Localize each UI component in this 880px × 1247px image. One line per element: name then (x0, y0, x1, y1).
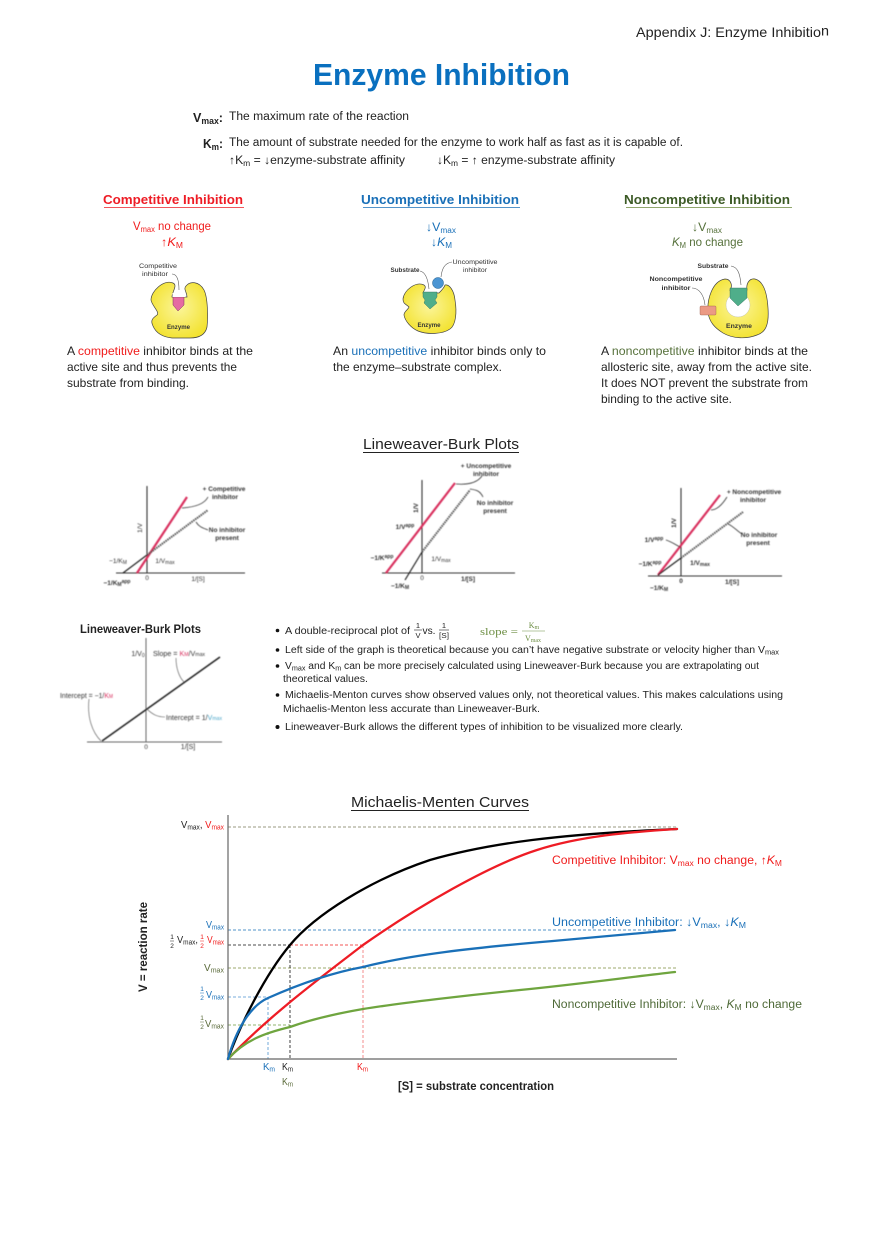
chart: annotated Lineweaver-Burk plot: Intercept = −1/KM (60, 693, 113, 700)
x tick: Km red: K (357, 1062, 364, 1073)
formula: slope (480, 621, 545, 644)
description: competitive: A competitive inhibitor binds at the (67, 344, 253, 358)
chart: competitive Lineweaver-Burk plot: −1/K (109, 558, 123, 565)
panel: competitive inhibition (67, 192, 253, 390)
chart: noncompetitive Lineweaver-Burk plot: present (746, 540, 771, 547)
chart: annotated Lineweaver-Burk plot: Intercept = 1/Vmax (166, 715, 222, 722)
y tick: half Vmax green: max (211, 1024, 224, 1030)
definition: Km: m (243, 159, 251, 168)
effect: noncompetitive: K (672, 235, 681, 249)
chart: noncompetitive Lineweaver-Burk plot: + Noncompetitive (727, 489, 782, 496)
label: competitive inhibitor: K (767, 855, 776, 867)
y tick: half Vmax black and red: max (213, 940, 224, 946)
chart: uncompetitive Lineweaver-Burk plot: inhibitor (473, 471, 499, 478)
chart: competitive Lineweaver-Burk plot: No inhibitor (209, 527, 246, 534)
bullet: double-reciprocal plot: 1 (442, 621, 446, 630)
definition: Km: = ↑ enzyme-substrate affinity (458, 155, 615, 167)
chart: competitive Lineweaver-Burk plot: max (165, 560, 175, 566)
formula: slope: m (535, 625, 540, 631)
chart: competitive Lineweaver-Burk plot: app (122, 579, 130, 585)
definition: Km: m (451, 159, 458, 168)
curve: noncompetitive inhibitor (228, 972, 675, 1059)
icon: enzyme with noncompetitive inhibitor: Noncompetitive (650, 276, 703, 283)
y tick: Vmax black and red: V (181, 820, 188, 831)
chart: noncompetitive Lineweaver-Burk plot: 1/V (671, 517, 678, 528)
effect: competitive: V (133, 219, 141, 233)
chart: competitive Lineweaver-Burk plot: M (117, 582, 122, 588)
effect: uncompetitive: ↓V (426, 220, 440, 234)
description: uncompetitive (333, 344, 546, 374)
curve: competitive inhibitor (228, 829, 677, 1059)
chart: noncompetitive Lineweaver-Burk plot: 1/[S] (725, 579, 739, 586)
chart: uncompetitive Lineweaver-Burk plot: −1/K (391, 583, 405, 590)
icon: enzyme with noncompetitive inhibitor: Enzyme (726, 323, 752, 330)
definition: Vmax: max (201, 116, 219, 126)
header: appendix label: n (821, 22, 829, 38)
chart: noncompetitive Lineweaver-Burk plot: max (700, 562, 710, 568)
bullet: observed values: Michaelis-Menton less accurate than Lineweaver-Burk. (283, 704, 540, 715)
y tick: half Vmax blue: V (206, 990, 213, 1001)
chart: annotated Lineweaver-Burk plot (60, 638, 222, 751)
curve: no inhibitor (228, 829, 677, 1059)
x tick: Km green: K (282, 1077, 289, 1088)
chart: uncompetitive Lineweaver-Burk plot (371, 463, 515, 591)
chart: competitive Lineweaver-Burk plot (104, 486, 246, 588)
chart: competitive Lineweaver-Burk plot: + Competitive (203, 486, 246, 493)
chart: competitive Lineweaver-Burk plot: 1/V (155, 558, 165, 565)
bullet: left side theoretical: max (765, 650, 780, 656)
definition: Km: m (212, 142, 219, 152)
chart: noncompetitive Lineweaver-Burk plot: No inhibitor (741, 532, 778, 539)
description: uncompetitive: An uncompetitive inhibitor binds only to (333, 344, 546, 358)
chart: noncompetitive Lineweaver-Burk plot: −1/K (639, 561, 653, 568)
description: noncompetitive: allosteric site, away from the active site. (601, 360, 812, 374)
y tick: Vmax green: max (211, 968, 224, 974)
subheading: Lineweaver-Burk plots: Lineweaver-Burk Plots (80, 624, 201, 636)
curve: uncompetitive inhibitor (228, 930, 675, 1059)
chart: noncompetitive Lineweaver-Burk plot: app (653, 560, 661, 566)
chart: uncompetitive Lineweaver-Burk plot: M (405, 585, 409, 591)
label: noncompetitive inhibitor: Noncompetitive Inhibitor: ↓V (552, 999, 695, 1011)
icon: enzyme with uncompetitive inhibitor: Substrate (390, 267, 420, 274)
y tick: half Vmax green: 2 (200, 1024, 204, 1031)
description: noncompetitive (601, 344, 812, 406)
bullet: more precise calculation: m (335, 666, 341, 672)
icon: enzyme with competitive inhibitor: Competitive (139, 263, 177, 270)
x tick: Km blue: K (263, 1062, 270, 1073)
chart: noncompetitive Lineweaver-Burk plot: 1/V (690, 560, 700, 567)
y tick: half Vmax black and red: 1 (200, 934, 204, 941)
heading: Lineweaver-Burk plots: Lineweaver-Burk Plots (363, 436, 519, 453)
x tick: Km red: m (363, 1066, 368, 1074)
y tick: half Vmax black and red: max (183, 940, 196, 946)
bullet: double-reciprocal plot: V (415, 631, 421, 640)
label: competitive inhibitor: Competitive Inhibitor: V (552, 855, 671, 867)
chart: noncompetitive Lineweaver-Burk plot: 1/V (645, 537, 654, 544)
panel: noncompetitive inhibition (601, 192, 812, 406)
x tick: Km black: K (282, 1062, 289, 1073)
chart: uncompetitive Lineweaver-Burk plot: max (441, 558, 451, 564)
bullet: more precise calculation: theoretical values. (283, 674, 368, 685)
label: noncompetitive inhibitor: , (720, 999, 726, 1011)
label: uncompetitive inhibitor: K (730, 917, 740, 929)
effect: competitive: ↑K (161, 235, 175, 249)
definition: Km: ↓K (437, 155, 450, 167)
y tick: half Vmax black and red: V (177, 935, 184, 946)
heading: uncompetitive: Uncompetitive Inhibition (361, 192, 519, 207)
bullet: double-reciprocal plot: [S] (439, 631, 449, 640)
chart: uncompetitive Lineweaver-Burk plot: −1/K (371, 555, 385, 562)
effect: competitive (133, 219, 211, 250)
definitions (193, 110, 683, 168)
bullet: more precise calculation: and K (305, 661, 336, 672)
definition: Vmax: V (193, 110, 202, 125)
bullet: observed values (276, 690, 783, 715)
y tick: half Vmax black and red: 2 (170, 943, 174, 950)
bullet: visualized clearly: Lineweaver-Burk allows the different types of inhibition to be visualized more clearly. (285, 722, 683, 733)
effect: uncompetitive: max (440, 226, 456, 235)
label: competitive inhibitor: no change, ↑ (694, 855, 767, 867)
chart: uncompetitive Lineweaver-Burk plot: present (483, 508, 508, 515)
definition: Km: K (203, 136, 212, 151)
y tick: half Vmax blue: 1 (200, 986, 204, 993)
y tick: half Vmax black and red: 2 (200, 943, 204, 950)
bullet: more precise calculation: max (292, 666, 306, 672)
formula: slope: max (531, 638, 541, 644)
icon: enzyme with uncompetitive inhibitor: inhibitor (463, 267, 488, 274)
bullet: double-reciprocal plot (276, 621, 449, 640)
chart: noncompetitive Lineweaver-Burk plot: M (664, 587, 668, 593)
icon: enzyme with competitive inhibitor: inhibitor (142, 271, 169, 278)
effect: noncompetitive: max (706, 226, 722, 235)
y tick: half Vmax blue: 2 (200, 995, 204, 1002)
y tick: half Vmax black and red: V (207, 935, 214, 946)
chart: annotated Lineweaver-Burk plot: 1/[S] (181, 744, 195, 751)
label: noncompetitive inhibitor: K (726, 999, 736, 1011)
heading: competitive: Competitive Inhibition (103, 192, 243, 207)
y tick: Vmax blue: max (212, 924, 224, 932)
chart: annotated Lineweaver-Burk plot: 0 (142, 653, 145, 659)
icon: enzyme with competitive inhibitor: Enzyme (167, 324, 190, 331)
chart: noncompetitive Lineweaver-Burk plot: inhibitor (740, 497, 766, 504)
chart: uncompetitive Lineweaver-Burk plot: 0 (420, 575, 424, 582)
effect: noncompetitive: ↓V (692, 220, 706, 234)
effect: uncompetitive (426, 220, 456, 250)
text block: Lineweaver-Burk notes (276, 621, 783, 733)
definition: Vmax: The maximum rate of the reaction (229, 111, 409, 123)
definition: Km: ↑K (229, 155, 242, 167)
chart: uncompetitive Lineweaver-Burk plot: 1/V (396, 524, 405, 531)
bullet: left side theoretical: Left side of the graph is theoretical because you can’t have negative substrate or velocity higher than V (285, 645, 740, 656)
chart: uncompetitive Lineweaver-Burk plot: app (405, 523, 414, 529)
heading: noncompetitive: Noncompetitive Inhibition (624, 192, 790, 207)
y tick: Vmax green: V (204, 963, 211, 974)
icon: enzyme with uncompetitive inhibitor: Uncompetitive (452, 259, 498, 266)
y tick: Vmax black and red: max (187, 824, 200, 832)
y tick: half Vmax green: 1 (200, 1015, 204, 1022)
y tick: half Vmax blue: max (212, 994, 224, 1002)
axes (228, 815, 677, 1059)
effect: noncompetitive: no change (686, 235, 743, 249)
label: uncompetitive inhibitor: , ↓ (717, 917, 730, 929)
chart: uncompetitive Lineweaver-Burk plot: app (385, 554, 393, 560)
icon: enzyme with uncompetitive inhibitor (390, 259, 498, 333)
formula: slope: V (525, 634, 531, 643)
x tick: Km black: m (288, 1066, 293, 1074)
formula: slope: slope = (480, 626, 518, 638)
label: uncompetitive inhibitor: Uncompetitive Inhibitor: ↓V (552, 917, 689, 929)
definition: Vmax: : (219, 110, 223, 125)
header: appendix label: Appendix J: Enzyme Inhibitio (636, 24, 816, 40)
y tick: half Vmax green (200, 1015, 224, 1031)
description: noncompetitive: A noncompetitive inhibitor binds at the (601, 344, 808, 358)
label: uncompetitive inhibitor: M (739, 921, 746, 930)
chart: competitive Lineweaver-Burk plot: inhibitor (212, 494, 238, 501)
y tick: Vmax black and red: , (200, 820, 205, 831)
icon: enzyme with noncompetitive inhibitor: inhibitor (662, 285, 691, 292)
effect: competitive: max (141, 225, 155, 234)
label: competitive inhibitor: M (775, 859, 782, 868)
bullet: observed values: Michaelis-Menton curves show observed values only, not theoretical values. This makes calculations using (285, 690, 783, 701)
x tick: Km blue: m (269, 1066, 275, 1074)
y tick: half Vmax black and red: , (195, 935, 198, 946)
chart: uncompetitive Lineweaver-Burk plot: 1/V (431, 556, 441, 563)
label: uncompetitive inhibitor: max (701, 921, 717, 930)
effect: noncompetitive (672, 220, 743, 250)
chart: noncompetitive Lineweaver-Burk plot (639, 488, 782, 593)
icon: enzyme with noncompetitive inhibitor: Substrate (698, 263, 729, 270)
chart: competitive Lineweaver-Burk plot: 1/[S] (191, 576, 205, 583)
description: uncompetitive: the enzyme–substrate complex. (333, 360, 502, 374)
label: competitive inhibitor: max (678, 859, 694, 868)
y tick: Vmax black and red: max (211, 824, 224, 832)
panel: uncompetitive inhibition (333, 192, 546, 374)
description: competitive: substrate from binding. (67, 376, 189, 390)
y tick: half Vmax black and red: 1 (170, 934, 174, 941)
y tick: half Vmax black and red (170, 934, 224, 950)
definition: Km: The amount of substrate needed for the enzyme to work half as fast as it is capable of. (229, 137, 683, 149)
description: competitive: active site and thus prevents the (67, 360, 237, 374)
bullet: double-reciprocal plot: vs. (422, 626, 436, 637)
effect: competitive: M (176, 241, 183, 250)
label: noncompetitive inhibitor: max (704, 1003, 720, 1012)
chart: competitive Lineweaver-Burk plot: 1/V (137, 522, 144, 533)
effect: noncompetitive: M (680, 241, 686, 250)
chart: uncompetitive Lineweaver-Burk plot: No inhibitor (477, 500, 514, 507)
chart: uncompetitive Lineweaver-Burk plot: 1/V (413, 502, 420, 513)
chart: Michaelis-Menten curves (138, 815, 802, 1093)
formula: slope: K (529, 621, 535, 630)
effect: uncompetitive: M (445, 241, 452, 250)
y tick: half Vmax green: V (205, 1019, 212, 1030)
definition: Km: : (219, 136, 223, 151)
effect: competitive: no change (155, 219, 211, 233)
chart: annotated Lineweaver-Burk plot: Slope = KM/Vmax (153, 651, 206, 658)
label: noncompetitive inhibitor: M (735, 1003, 742, 1012)
icon: enzyme with noncompetitive inhibitor (650, 263, 768, 338)
chart: annotated Lineweaver-Burk plot: 0 (144, 744, 148, 751)
bullet: double-reciprocal plot: 1 (416, 621, 420, 630)
heading: Michaelis-Menten curves: Michaelis-Menten Curves (351, 794, 529, 811)
chart: competitive Lineweaver-Burk plot: M (123, 560, 127, 566)
bullet: more precise calculation: V (285, 661, 292, 672)
bullet: double-reciprocal plot: A double-reciprocal plot of (285, 626, 410, 637)
icon: enzyme with uncompetitive inhibitor: Enzyme (418, 322, 441, 329)
chart: noncompetitive Lineweaver-Burk plot: app (654, 536, 663, 542)
y tick: half Vmax blue (200, 986, 224, 1002)
definition: Vmax (193, 110, 409, 126)
chart: annotated Lineweaver-Burk plot: 1/V (131, 651, 142, 658)
definition: Km (203, 136, 683, 168)
chart: noncompetitive Lineweaver-Burk plot: −1/K (650, 585, 664, 592)
icon: enzyme with competitive inhibitor (139, 263, 208, 338)
chart: uncompetitive Lineweaver-Burk plot: 1/[S] (461, 576, 475, 583)
chart: competitive Lineweaver-Burk plot: 0 (145, 575, 149, 582)
chart: noncompetitive Lineweaver-Burk plot: 0 (679, 578, 683, 585)
y tick: Vmax black and red: V (205, 820, 224, 832)
chart: uncompetitive Lineweaver-Burk plot: + Uncompetitive (461, 463, 512, 470)
description: noncompetitive: binding to the active site. (601, 392, 732, 406)
bullet: more precise calculation: can be more precisely calculated using Lineweaver-Burk because you are extrapolating out (341, 661, 759, 672)
chart: competitive Lineweaver-Burk plot: −1/K (104, 580, 117, 587)
label: noncompetitive inhibitor: no change (742, 999, 802, 1011)
x tick: Km green: m (288, 1082, 293, 1088)
definition: Km: = ↓enzyme-substrate affinity (250, 155, 405, 167)
guide lines (228, 827, 677, 1059)
axis label: S: [S] = substrate concentration (398, 1081, 554, 1093)
effect: uncompetitive: ↓K (431, 235, 445, 249)
y tick: Vmax blue: V (206, 920, 213, 931)
axis label: V: V = reaction rate (138, 902, 150, 992)
description: competitive (67, 344, 253, 390)
title: Enzyme Inhibition (313, 57, 570, 92)
bullet: more precise calculation (276, 661, 759, 685)
chart: competitive Lineweaver-Burk plot: present (215, 535, 240, 542)
description: noncompetitive: It does NOT prevent the substrate from (601, 376, 808, 390)
